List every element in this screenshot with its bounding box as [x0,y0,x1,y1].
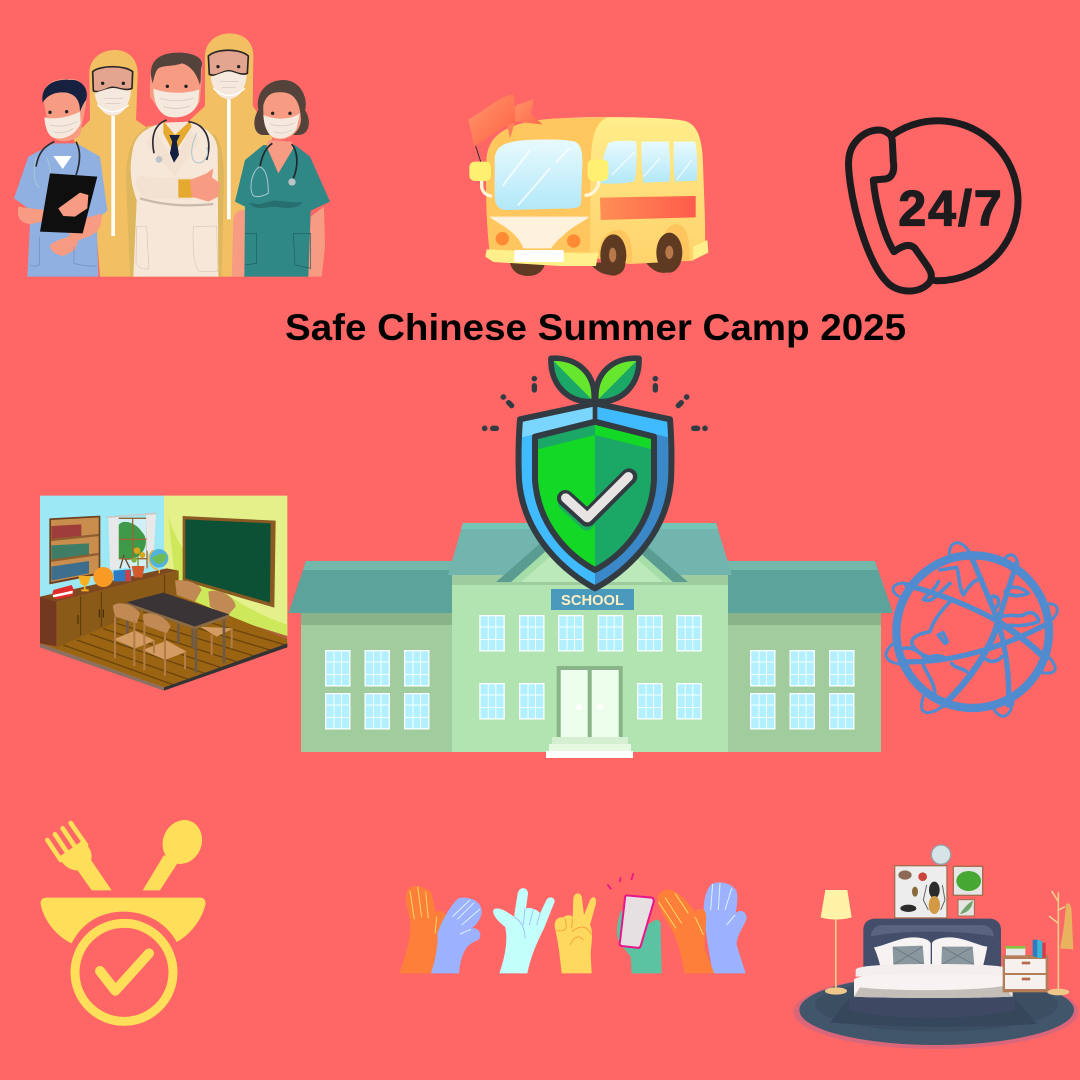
illustration: raised hands [399,873,747,973]
right wing [728,561,893,752]
left hazmat worker [73,50,147,277]
icon: school bus [468,94,708,276]
wall art [895,845,983,918]
rock sign hand [493,888,555,973]
periwinkle hand left [431,898,482,973]
peace sign hand [555,893,596,973]
orange hand right [657,889,714,973]
door [557,666,623,742]
windows [325,615,854,730]
periwinkle hand right [704,882,747,973]
coat rack [1047,891,1073,995]
bowl [41,898,206,943]
front panel and lights [489,217,589,248]
blackboard [183,516,287,640]
walls [40,496,164,597]
mirrors [482,177,491,196]
objects on cabinet [52,547,168,599]
wheel arches [598,224,690,263]
bus body [486,117,705,264]
leaves [551,358,639,402]
illustration: bedroom [794,845,1078,1049]
pillows [874,937,987,965]
nightstand [1003,939,1048,992]
bookshelf [49,516,100,584]
shield outer [519,403,595,588]
24/7 label: 24/7 [898,180,1002,236]
meridians [903,553,1045,705]
headboard [863,919,1001,1000]
nurse in blue [14,79,107,277]
entrance steps [546,737,633,758]
nurse in teal [232,80,330,277]
check circle [75,923,173,1021]
shield inner [535,422,595,570]
illustration: classroom [40,496,297,691]
title: Safe Chinese Summer Camp 2025 [285,307,906,348]
wheels [509,260,625,276]
red stripe [600,196,696,220]
hand with phone [607,873,662,973]
right hazmat worker [190,33,273,277]
floor [40,595,297,691]
call circle [893,121,1018,281]
icon: wire globe [886,543,1057,716]
spoon [143,814,209,890]
continents [903,567,1039,695]
check mark [565,483,628,524]
mattress [849,964,1015,1017]
icon: medical team [14,33,330,277]
globe outline [896,555,1049,708]
icon: safety shield [482,358,708,588]
icon: 24/7 phone [849,121,1018,291]
school sign: SCHOOL [561,592,624,609]
bumper [485,249,598,266]
doctor [126,53,224,277]
school building [288,498,893,758]
side wheels [600,234,626,276]
orange hand left [399,886,446,973]
window with tree [106,513,157,570]
side windows [600,141,637,184]
table and chairs [113,580,236,676]
central block [448,498,732,752]
handset [849,130,931,291]
floor lamp [821,890,852,995]
orbit rings [886,543,1057,716]
fork [47,823,112,890]
left wing [288,561,452,752]
school sign [551,589,634,610]
spark marks [482,376,708,431]
sideboard cabinet [40,568,179,647]
flag [476,146,481,162]
check mark [100,953,149,991]
icon: safe food [41,814,209,1021]
rug [794,974,1078,1049]
windshield [495,139,582,210]
